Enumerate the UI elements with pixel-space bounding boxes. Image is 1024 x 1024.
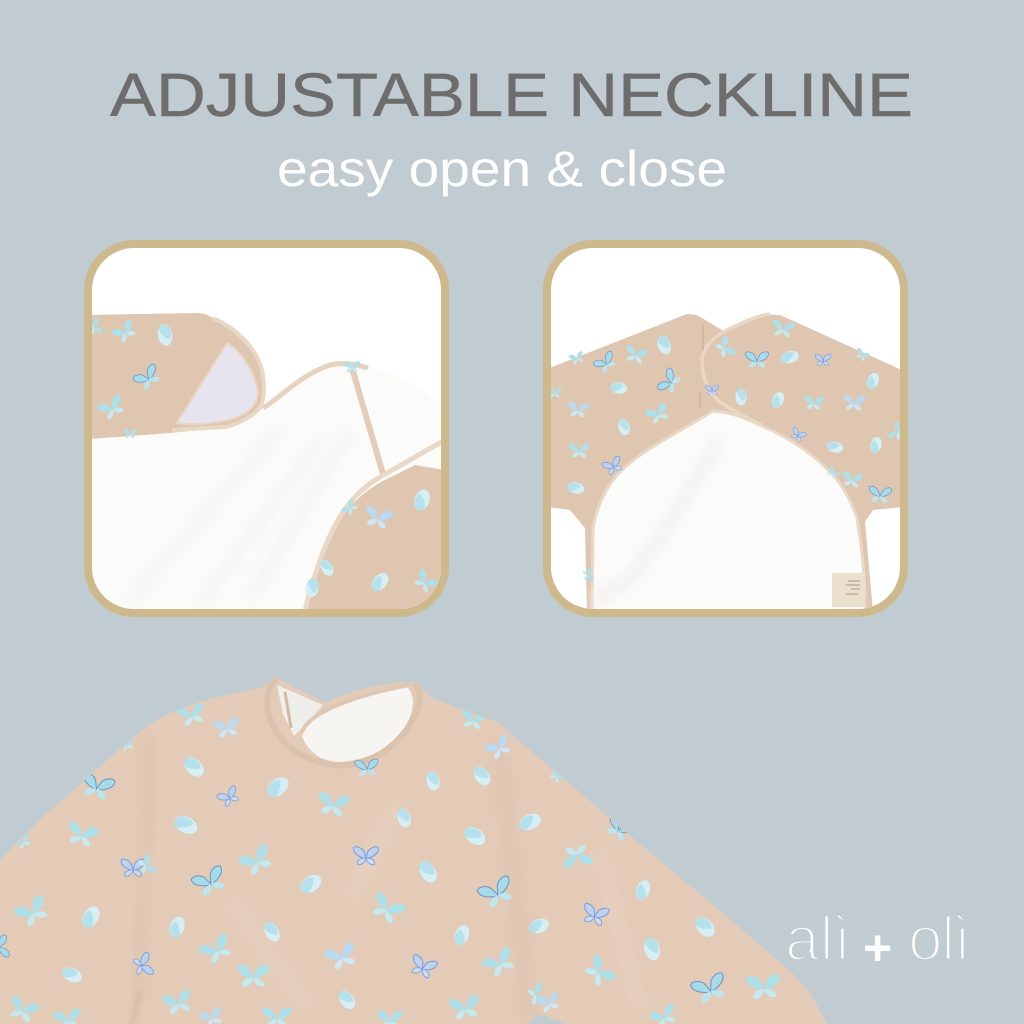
butterfly print bbox=[0, 703, 782, 1024]
product: butterfly smock bbox=[0, 678, 827, 1024]
right flap bbox=[404, 572, 441, 609]
logo: ali + oli: olì bbox=[908, 905, 971, 974]
closed bib photo bbox=[547, 314, 906, 612]
title: ADJUSTABLE NECKLINE bbox=[110, 61, 913, 129]
logo: ali + oli bbox=[785, 905, 971, 976]
panel frame bbox=[547, 244, 904, 613]
panel: neckline closed bbox=[547, 244, 906, 613]
subtitle: easy open & close bbox=[277, 141, 727, 197]
logo: ali + oli: alì bbox=[785, 905, 851, 974]
panel frame bbox=[88, 244, 445, 613]
white bib lining bbox=[92, 568, 441, 609]
overlapping right flap outline bbox=[702, 314, 770, 425]
sleeve gap bbox=[528, 1014, 566, 1024]
garment body bbox=[0, 678, 827, 1024]
opened bib photo bbox=[87, 313, 445, 612]
fabric shading bbox=[130, 735, 640, 1024]
beige shoulders bbox=[547, 314, 904, 612]
white lining bbox=[302, 687, 413, 762]
neck trim bbox=[267, 680, 420, 765]
white bib lining bbox=[592, 411, 865, 612]
care label bbox=[832, 573, 865, 607]
back neck inner bbox=[277, 685, 323, 736]
butterflies bbox=[87, 317, 439, 599]
neckline bbox=[267, 680, 420, 765]
left flap with velcro window bbox=[88, 313, 264, 439]
logo: ali + oli: + bbox=[863, 920, 892, 976]
neck piping and strap bbox=[263, 364, 368, 408]
panel: neckline opened bbox=[87, 244, 445, 613]
butterflies bbox=[548, 319, 906, 582]
